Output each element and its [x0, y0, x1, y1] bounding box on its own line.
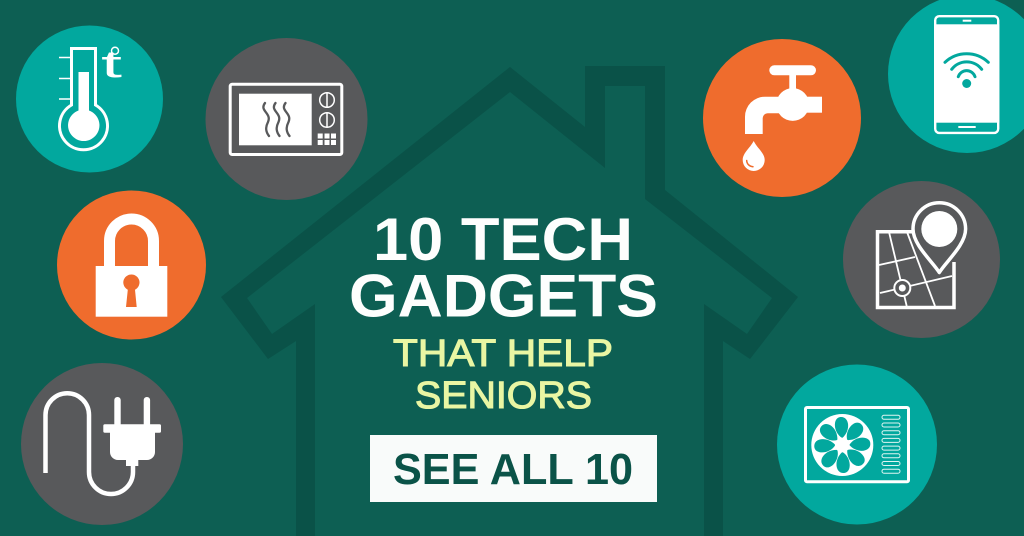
icon: padlock: [57, 190, 206, 340]
icon: thermometer: t: [101, 44, 123, 86]
subtitle: that help seniors: THAT HELP: [393, 333, 613, 375]
house outline: [221, 66, 798, 536]
icon: thermometer: [16, 26, 163, 172]
title: 10 tech gadgets: 10 TECH: [373, 206, 633, 273]
icon: plug and cord: [21, 363, 183, 525]
icon: air conditioner unit: [777, 364, 937, 524]
button: see all 10: SEE ALL 10: [393, 445, 633, 494]
subtitle: that help seniors: SENIORS: [415, 375, 592, 417]
title: 10 tech gadgets: [349, 206, 658, 330]
icon: microwave: [206, 38, 368, 200]
icon: faucet: [703, 39, 861, 197]
icon: map with location pin: [843, 181, 1000, 338]
title: 10 tech gadgets: GADGETS: [349, 262, 658, 330]
button: see all 10: [370, 435, 657, 502]
icon: smartphone with wifi: [888, 0, 1024, 153]
subtitle: that help seniors: [393, 333, 613, 417]
